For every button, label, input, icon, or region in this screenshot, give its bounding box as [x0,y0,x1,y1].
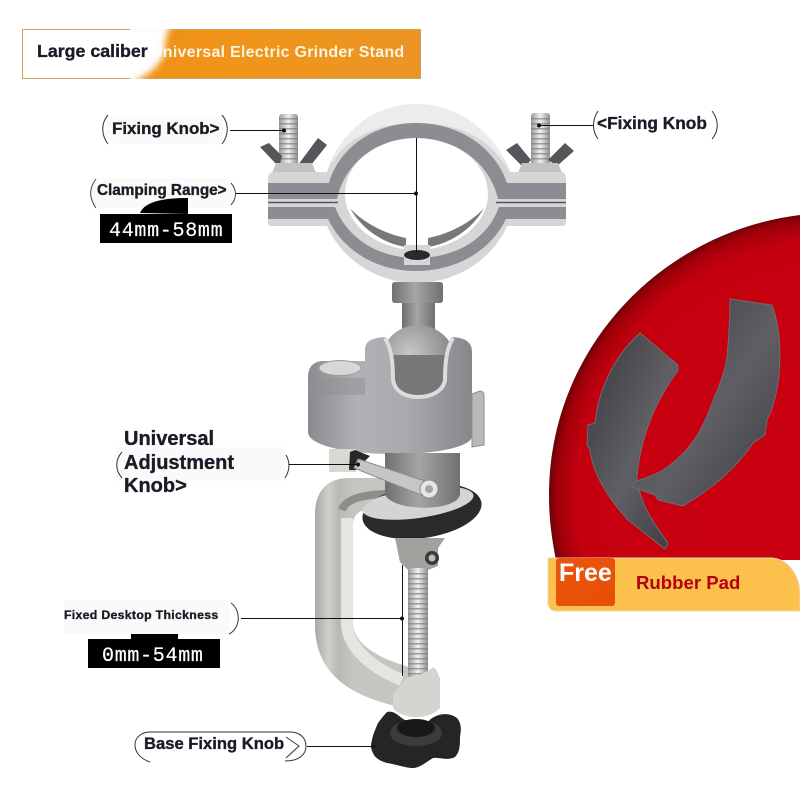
label: fixing knob right [594,111,717,139]
head body [308,337,484,454]
label: universal adjustment knob [115,428,289,497]
rubber ring [359,476,485,546]
red panel: free rubber pad [548,215,800,611]
title text light: Universal Electric Grinder Stand [151,44,404,61]
pointer: base fixing knob [307,745,376,748]
label: fixing knob right: <Fixing Knob [597,113,707,133]
label: fixed desktop thickness [64,600,238,668]
lower block [393,667,440,717]
pointer: universal adjustment knob [289,462,360,466]
label: universal adjustment knob: Universal [124,428,214,450]
rubber pad text: Rubber Pad [636,572,740,593]
label: universal adjustment knob: Adjustment [124,452,234,474]
label: fixed desktop thickness: Fixed Desktop Thickness [64,608,219,622]
label: universal adjustment knob: Knob> [124,475,187,497]
pointer: fixing knob left [230,128,286,132]
label: base fixing knob [135,732,306,762]
right fixing bolt [506,113,574,173]
label: clamping range [91,178,236,243]
free banner [548,558,800,611]
value: 44mm-58mm [100,214,232,243]
pointer: fixed desktop thickness [241,565,404,676]
label: base fixing knob: Base Fixing Knob [144,734,284,753]
pointer: fixing knob right [537,124,593,128]
side tab [472,391,484,447]
clamp ring [268,104,566,283]
free text: Free [559,559,612,587]
label: fixing knob left: Fixing Knob> [112,119,220,138]
value: 0mm-54mm: 0mm-54mm [102,645,204,668]
stand product [260,104,574,768]
value: 0mm-54mm [88,639,220,668]
value: 44mm-58mm: 44mm-58mm [109,220,223,243]
pointer: clamping range [236,138,418,253]
label: clamping range: Clamping Range> [97,182,227,199]
C clamp arm [315,478,440,706]
adjustment lever [329,449,438,498]
title text dark: Large caliber [37,41,148,61]
rubber pad right [632,299,780,506]
base knob [371,712,461,768]
column neck [385,453,460,508]
rubber pad left [587,333,678,549]
label: fixing knob left [103,115,227,144]
neck and ball joint [379,282,457,407]
free badge [556,558,615,606]
title banner [14,24,420,84]
left fixing bolt [260,114,327,173]
clamp screw [395,538,445,678]
